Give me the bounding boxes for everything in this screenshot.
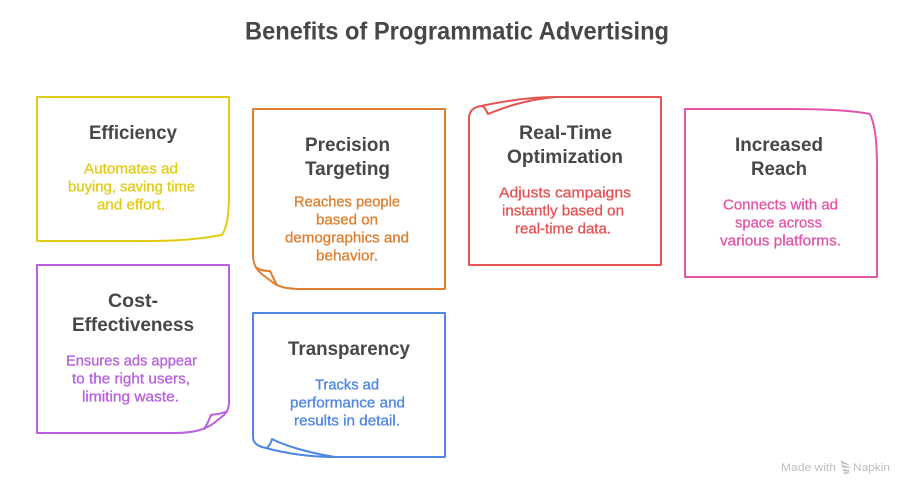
watermark: made with napkin: Made with — [781, 462, 836, 474]
heading: precision targeting — [305, 134, 390, 180]
text: increased reach description: space across — [735, 216, 822, 232]
panel outline: efficiency — [37, 97, 229, 241]
text: cost-effectiveness description: Ensures ads appear — [66, 354, 197, 370]
text: cost-effectiveness description: to the right users, — [72, 372, 190, 388]
heading: cost-effectiveness: Effectiveness — [72, 314, 194, 336]
text: real-time optimization description: Adjusts campaigns — [499, 186, 631, 202]
panel outline: increased reach — [685, 109, 877, 277]
heading: increased reach: Increased — [735, 134, 823, 156]
heading: real-time optimization: Optimization — [507, 146, 623, 168]
panel: real-time optimization — [469, 97, 661, 265]
text: precision targeting description: demographics and — [285, 230, 409, 246]
text: efficiency description: Automates ad — [84, 162, 178, 178]
watermark: made with napkin — [781, 461, 890, 474]
icon: folded corner, transparency — [267, 439, 335, 457]
title: Benefits of Programmatic Advertising — [245, 18, 669, 46]
text: cost-effectiveness description — [66, 354, 197, 406]
text: precision targeting description — [285, 194, 409, 264]
text: efficiency description: buying, saving time — [68, 180, 195, 196]
text: precision targeting description: based on — [316, 212, 378, 228]
panel: efficiency — [37, 97, 229, 241]
text: real-time optimization description: instantly based on — [502, 204, 624, 220]
heading: real-time optimization: Real-Time — [519, 122, 612, 144]
text: efficiency description: and effort. — [97, 198, 165, 214]
icon: folded corner, precision targeting — [257, 268, 277, 285]
heading: precision targeting: Targeting — [305, 158, 390, 180]
panel: cost-effectiveness — [37, 265, 229, 433]
icon: folded corner, real-time optimization — [481, 97, 555, 114]
text: precision targeting description: behavior. — [316, 248, 378, 264]
heading: increased reach — [735, 134, 823, 180]
text: precision targeting description: Reaches people — [294, 194, 400, 210]
panel outline: real-time optimization — [469, 97, 661, 265]
watermark: made with napkin: Napkin — [853, 462, 890, 474]
panel: increased reach — [685, 109, 877, 277]
heading: transparency: Transparency — [288, 338, 410, 360]
icon: napkin logo — [841, 461, 850, 474]
panel outline: precision targeting — [253, 109, 445, 289]
text: transparency description: results in detail. — [294, 414, 400, 430]
panel outline: transparency — [253, 313, 445, 457]
text: increased reach description: Connects with ad — [723, 198, 838, 214]
heading: increased reach: Reach — [751, 158, 807, 180]
text: cost-effectiveness description: limiting waste. — [82, 390, 179, 406]
icon: folded corner, cost-effectiveness — [204, 412, 225, 429]
text: increased reach description: various platforms. — [720, 234, 841, 250]
heading: cost-effectiveness: Cost- — [108, 290, 158, 312]
text: real-time optimization description — [499, 186, 631, 238]
heading: real-time optimization — [507, 122, 623, 168]
text: efficiency description — [68, 162, 195, 214]
heading: efficiency: Efficiency — [89, 122, 177, 144]
heading: cost-effectiveness — [72, 290, 194, 336]
text: increased reach description — [720, 198, 841, 250]
panel outline: cost-effectiveness — [37, 265, 229, 433]
text: transparency description: Tracks ad — [315, 378, 379, 394]
text: real-time optimization description: real-time data. — [515, 222, 611, 238]
text: transparency description: performance and — [290, 396, 405, 412]
panel: transparency — [253, 313, 445, 457]
heading: precision targeting: Precision — [305, 134, 390, 156]
text: transparency description — [290, 378, 405, 430]
panel: precision targeting — [253, 109, 445, 289]
